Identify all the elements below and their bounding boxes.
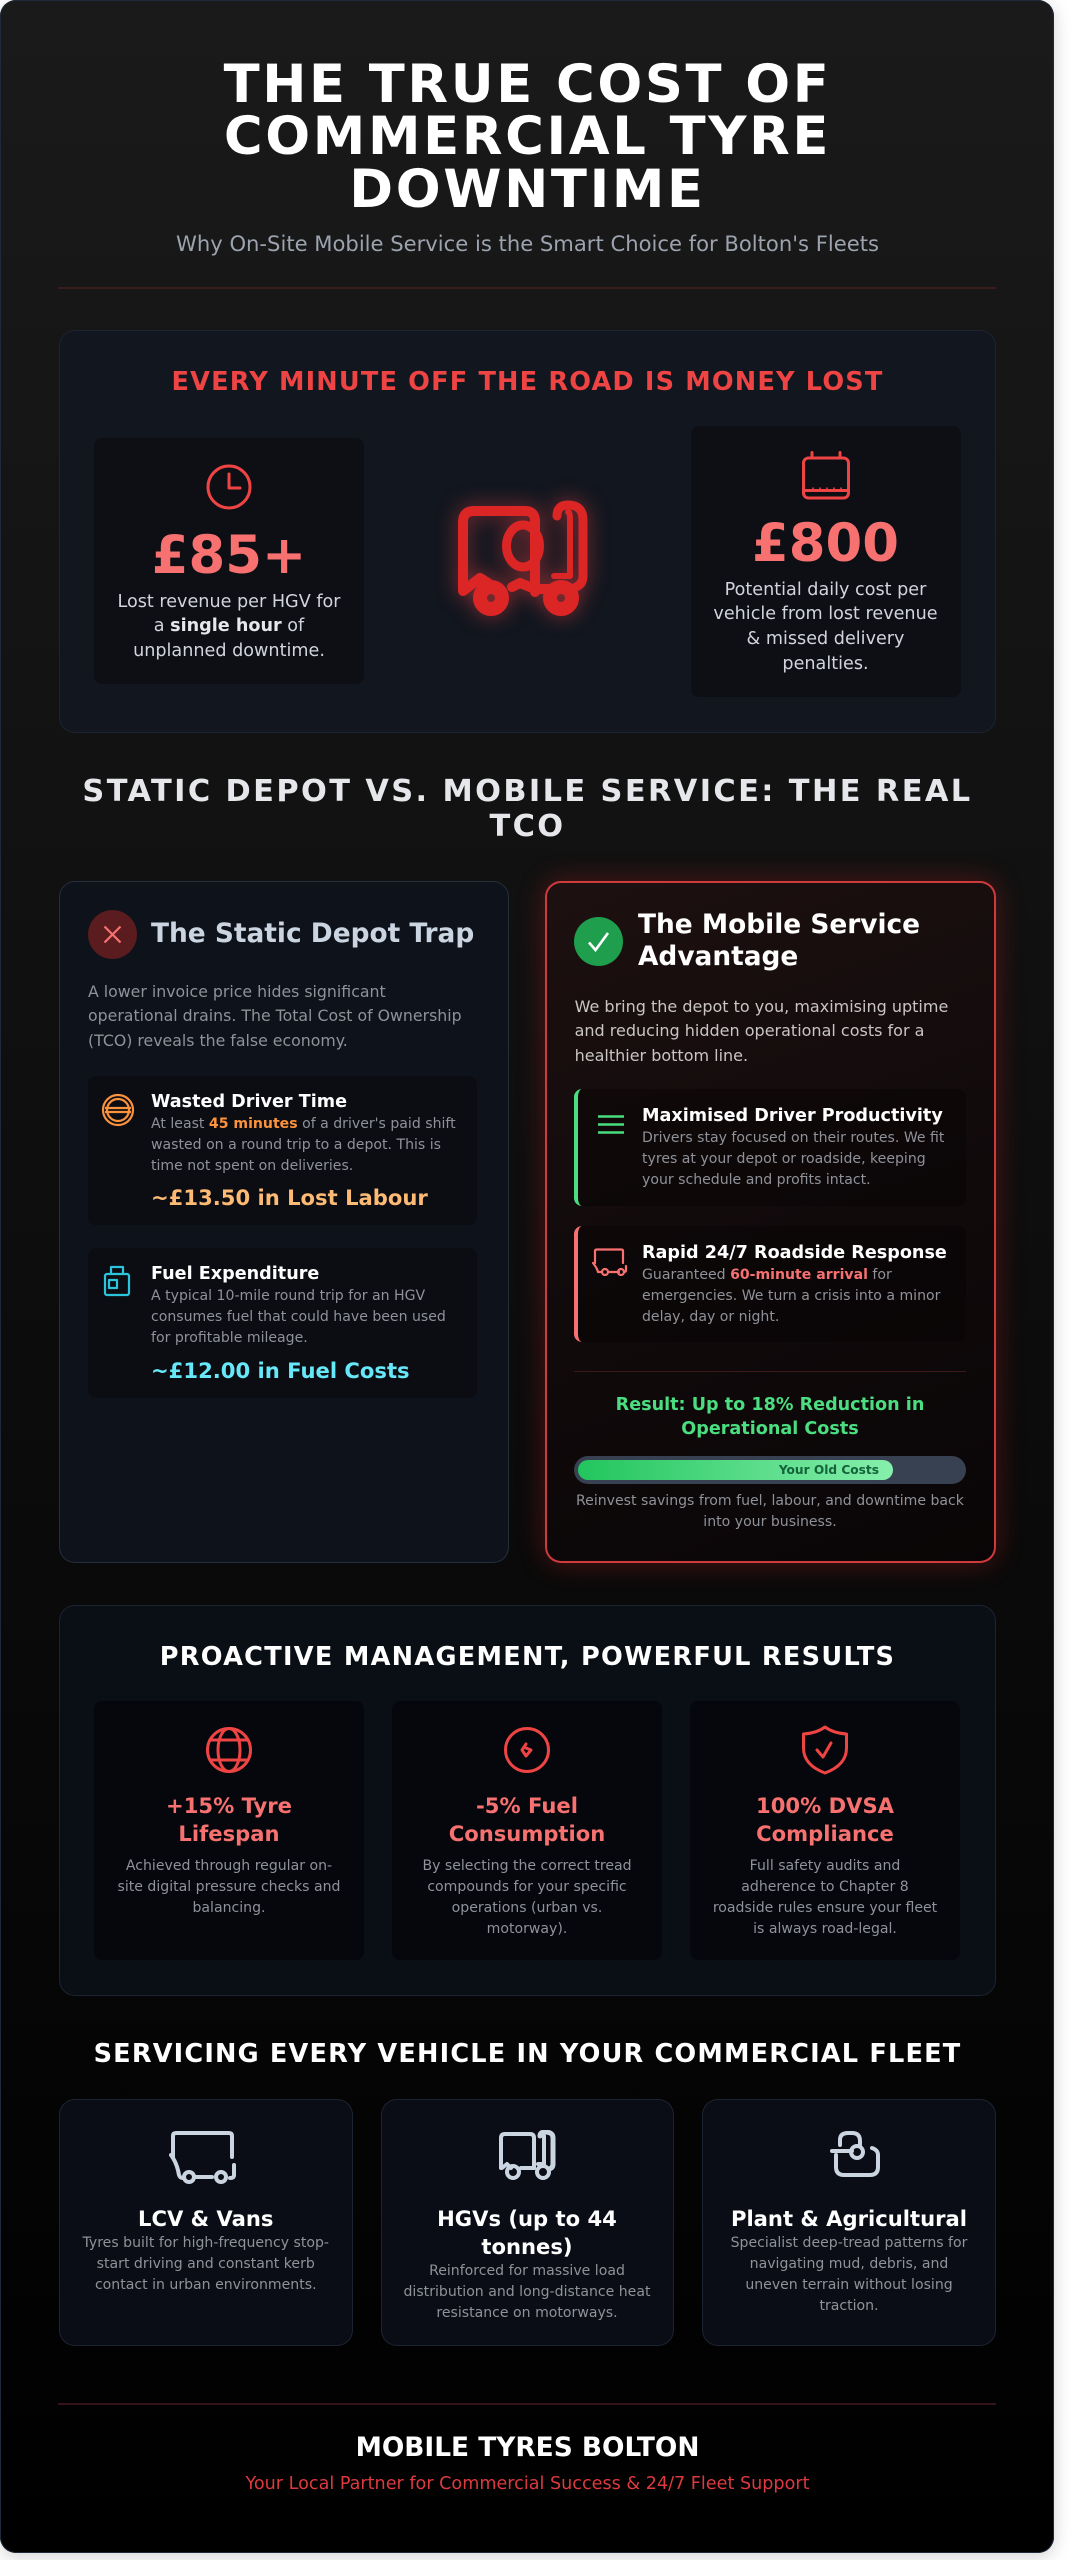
description: Lost revenue per HGV for [117,592,341,612]
icon: globe [206,1727,252,1773]
value: £800 [752,512,899,574]
title: DOWNTIME [349,159,706,220]
icon: fuel pump [104,1266,130,1296]
value: £85+ [152,525,306,586]
panel heading: PROACTIVE MANAGEMENT, POWERFUL RESULTS [160,1642,895,1672]
result text: operations (urban vs. [452,1900,602,1916]
intro text: A lower invoice price hides significant [88,982,386,1001]
panel title [638,909,920,972]
icon: van [592,1248,628,1276]
description: a single hour of [154,616,304,636]
vehicle text: resistance on motorways. [436,2305,618,2321]
vehicle title: tonnes) [481,2234,573,2259]
savings bar [574,1456,966,1484]
vehicle title [437,2206,617,2259]
result heading: 100% DVSA [756,1793,894,1818]
feature text [151,1116,456,1174]
icon: check [574,917,623,966]
vehicle text: traction. [819,2298,879,2314]
result card: tyre lifespan [94,1701,364,1960]
intro text: (TCO) reveals the false economy. [88,1031,348,1050]
feature text: wasted on a round trip to a depot. This is [151,1137,441,1153]
vehicle text [731,2234,968,2314]
feature text: tyres at your depot or roadside, keeping [642,1151,926,1167]
result text: compounds for your specific [427,1879,627,1895]
vehicle text: uneven terrain without losing [745,2277,953,2293]
result heading: Lifespan [178,1821,280,1846]
feature: fuel expenditure [88,1248,477,1398]
feature: wasted driver time [88,1076,477,1225]
icon: orange ring [102,1094,134,1126]
description: Potential daily cost per [725,580,926,600]
panel: every minute costs [59,330,996,733]
tagline: Your Local Partner for Commercial Success & 24/7 Fleet Support [245,2474,810,2494]
feature: roadside response [574,1226,966,1342]
section heading: comparison [82,774,973,844]
feature text: At least 45 minutes of a driver's paid shift [151,1116,456,1132]
icon: lorry [499,2130,556,2180]
feature text: Guaranteed 60-minute arrival for [642,1266,892,1282]
result text: Achieved through regular on- [126,1858,332,1874]
result heading: Consumption [449,1821,605,1846]
feature text: time not spent on deliveries. [151,1158,353,1174]
description: penalties. [782,654,869,674]
title [224,54,831,220]
caption [576,1492,964,1530]
section heading: fleet: SERVICING EVERY VEHICLE IN YOUR COMMERCIAL FLEET [94,2039,961,2069]
result text: adherence to Chapter 8 [741,1879,909,1895]
vehicle text: distribution and long-distance heat [404,2284,650,2300]
result text [422,1858,632,1937]
result heading: +15% Tyre [166,1793,292,1818]
vehicle title: Plant & Agricultural [731,2206,967,2231]
result text [118,1858,340,1916]
feature title: Fuel Expenditure [151,1264,319,1284]
icon: lines [598,1115,624,1134]
icon: shield [802,1726,848,1774]
feature text: for profitable mileage. [151,1330,308,1346]
title: THE TRUE COST OF [224,54,831,114]
cost: ~£13.50 in Lost Labour [151,1185,428,1210]
vehicle title: HGVs (up to 44 [437,2206,617,2231]
vehicle text: Reinforced for massive load [429,2263,625,2279]
intro text: operational drains. The Total Cost of Ownership [88,1006,462,1025]
intro text [88,982,462,1050]
result text: roadside rules ensure your fleet [713,1900,937,1916]
vehicle card: hgvs [380,2099,674,2346]
description [117,592,341,661]
intro text: healthier bottom line. [575,1046,748,1065]
title: COMMERCIAL TYRE [224,106,831,167]
intro text [575,997,948,1065]
description: vehicle from lost revenue [713,604,938,624]
result text: is always road-legal. [753,1921,897,1937]
icon: calendar [802,451,850,500]
vehicle text: Tyres built for high-frequency stop- [82,2234,329,2250]
footer [245,2432,810,2494]
panel: static depot trap [59,881,509,1563]
caption: into your business. [703,1514,837,1530]
panel: mobile service advantage [545,881,996,1563]
result card: dvsa compliance [690,1701,960,1960]
icon: gauge [504,1727,550,1773]
panel title: Advantage [638,941,798,972]
panel title: The Mobile Service [638,909,920,940]
section heading: comparison: TCO [489,809,566,844]
vehicle title: LCV & Vans [138,2206,273,2231]
intro text: and reducing hidden operational costs for a [575,1021,924,1040]
result statement: Result: Up to 18% Reduction in [616,1395,924,1415]
feature title: Wasted Driver Time [151,1092,347,1112]
feature text: Drivers stay focused on their routes. We fit [642,1130,944,1146]
section heading: comparison: STATIC DEPOT VS. MOBILE SERVICE: THE REAL [82,774,973,809]
intro text: We bring the depot to you, maximising uptime [575,997,948,1016]
feature text: your schedule and profits intact. [642,1172,871,1188]
result text: By selecting the correct tread [422,1858,632,1874]
cost: ~£12.00 in Fuel Costs [151,1358,410,1383]
description: unplanned downtime. [133,641,325,661]
icon: truck [444,488,602,628]
vehicle text: Specialist deep-tread patterns for [731,2234,967,2250]
result text [713,1858,937,1937]
description: & missed delivery [747,629,904,649]
result heading: -5% Fuel [476,1793,578,1818]
feature title: Maximised Driver Productivity [642,1106,943,1126]
feature: driver productivity [574,1089,966,1206]
stat card: daily loss [690,426,960,697]
result text: site digital pressure checks and [118,1879,340,1895]
subtitle: Why On-Site Mobile Service is the Smart Choice for Bolton's Fleets [176,231,879,256]
panel heading: EVERY MINUTE OFF THE ROAD IS MONEY LOST [172,366,883,396]
result heading [756,1793,894,1846]
feature text: delay, day or night. [642,1309,779,1325]
description [713,580,938,674]
vehicle text: start driving and constant kerb [97,2256,315,2272]
header [176,54,879,256]
bar fill [578,1460,893,1480]
feature text [642,1130,944,1188]
result statement [616,1395,924,1439]
result text: motorway). [487,1921,567,1937]
result text: Full safety audits and [750,1858,900,1874]
feature text [151,1288,446,1346]
result text: balancing. [192,1900,266,1916]
panel title: The Static Depot Trap [151,918,474,948]
brand name: MOBILE TYRES BOLTON [356,2432,699,2463]
icon: plant [830,2131,880,2177]
icon: clock [206,464,252,510]
feature text [642,1266,940,1325]
vehicle text [404,2263,650,2321]
feature title: Rapid 24/7 Roadside Response [642,1243,947,1263]
caption: Reinvest savings from fuel, labour, and downtime back [576,1492,964,1508]
icon: van [169,2131,236,2184]
bar fill: Your Old Costs [779,1463,879,1477]
vehicle text: contact in urban environments. [95,2277,317,2293]
result heading: Compliance [756,1821,894,1846]
stat card: hourly loss [94,438,364,684]
vehicle text [82,2234,329,2293]
vehicle text: navigating mud, debris, and [750,2256,948,2272]
result card: fuel consumption [392,1701,662,1960]
vehicle card: plant and agricultural [702,2099,996,2346]
feature text: emergencies. We turn a crisis into a minor [642,1288,940,1304]
result heading [449,1793,605,1846]
feature text: consumes fuel that could have been used [151,1309,446,1325]
feature text: A typical 10-mile round trip for an HGV [151,1288,425,1304]
vehicle card: lcv and vans [59,2099,352,2346]
icon: cross [88,910,137,959]
result statement: Operational Costs [681,1419,859,1439]
result heading [166,1793,292,1846]
panel: proactive results [59,1605,996,1996]
